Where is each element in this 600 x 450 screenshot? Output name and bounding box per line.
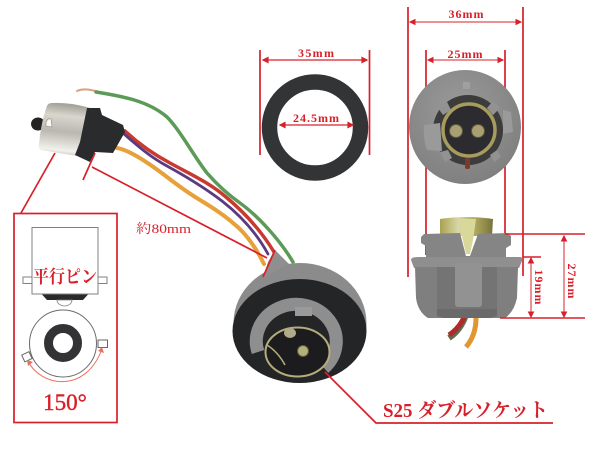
centre terminal (298, 346, 308, 356)
top inner lug (295, 307, 312, 316)
25mm label: 25mm (448, 47, 482, 61)
inner grey ring (256, 304, 336, 368)
upper collar (421, 233, 511, 258)
recess panel (437, 267, 497, 309)
arc arrowheads (27, 347, 104, 366)
side lug right (503, 110, 513, 134)
wire harness (77, 89, 293, 264)
upper terminal (284, 328, 296, 338)
terminal right (472, 124, 484, 138)
25mm arrow (428, 58, 503, 62)
length measure (83, 153, 275, 277)
inner grey lugs (438, 101, 501, 162)
parallel pin label: 平行ピン (33, 267, 97, 287)
product name label: S25 ダブルソケット (383, 399, 548, 422)
red wire (125, 131, 274, 252)
right pin (98, 340, 108, 348)
metal collar (440, 217, 493, 236)
dimension lines: bulb-end socket width (408, 7, 523, 277)
leader: socket label (325, 372, 553, 423)
outer diameter label: 35mm (298, 46, 334, 60)
inner diameter arrow (280, 122, 353, 128)
socket height dimensions (500, 234, 585, 318)
red wire stub (465, 158, 470, 169)
end view contact ring (48, 328, 78, 358)
panel frame (14, 214, 117, 422)
terminal left (450, 124, 462, 138)
bulb end elevation (30, 310, 96, 377)
outer diameter arrow (263, 58, 367, 62)
grey body (409, 70, 521, 184)
centre post (455, 263, 482, 307)
150 degree label: 150° (43, 390, 87, 415)
lower body band (437, 309, 497, 318)
left pin (22, 352, 32, 362)
pin on shell (46, 119, 52, 127)
inner collar (433, 95, 503, 165)
socket front view (232, 250, 366, 383)
bulb side elevation (23, 228, 107, 294)
side view of socket (411, 217, 522, 347)
metal contact ring (443, 104, 495, 156)
19mm arrow (528, 258, 534, 317)
wire tab (263, 250, 289, 278)
19mm label: 19mm (532, 270, 546, 304)
socket contact disc (266, 328, 330, 376)
green wire (96, 92, 293, 262)
leader lines (21, 153, 553, 423)
27mm label: 27mm (565, 264, 579, 298)
top key notch (463, 82, 470, 89)
ring dimensions (260, 46, 370, 155)
spring clip (267, 345, 285, 365)
grey flange (234, 263, 366, 383)
bulb contact base (42, 294, 88, 300)
ring gasket (270, 82, 360, 173)
rubber boot (75, 108, 125, 162)
top view of socket (409, 70, 521, 184)
flange (411, 257, 522, 268)
side lug left (424, 123, 442, 151)
27mm arrow (562, 236, 566, 317)
rubber gasket (232, 279, 366, 383)
length label: 約80mm (136, 221, 191, 236)
photo: bulb with rubber boot (31, 103, 125, 162)
36mm label: 36mm (448, 7, 484, 21)
leader: bulb to panel (21, 153, 55, 213)
bulb metal shell (39, 103, 90, 156)
purple wire (124, 134, 268, 254)
inner diameter label: 24.5mm (293, 111, 339, 125)
drawing: pin layout panel (14, 214, 117, 422)
150 degree arc (28, 349, 102, 382)
socket width dimensions (410, 7, 521, 62)
orange wire (117, 148, 264, 264)
wires below socket (449, 307, 468, 338)
36mm arrow (410, 20, 521, 24)
notch opening (458, 219, 476, 254)
body (415, 267, 518, 318)
bulb tip (31, 118, 45, 130)
bulb contact tip (57, 300, 72, 306)
copper wire tip (77, 89, 96, 91)
